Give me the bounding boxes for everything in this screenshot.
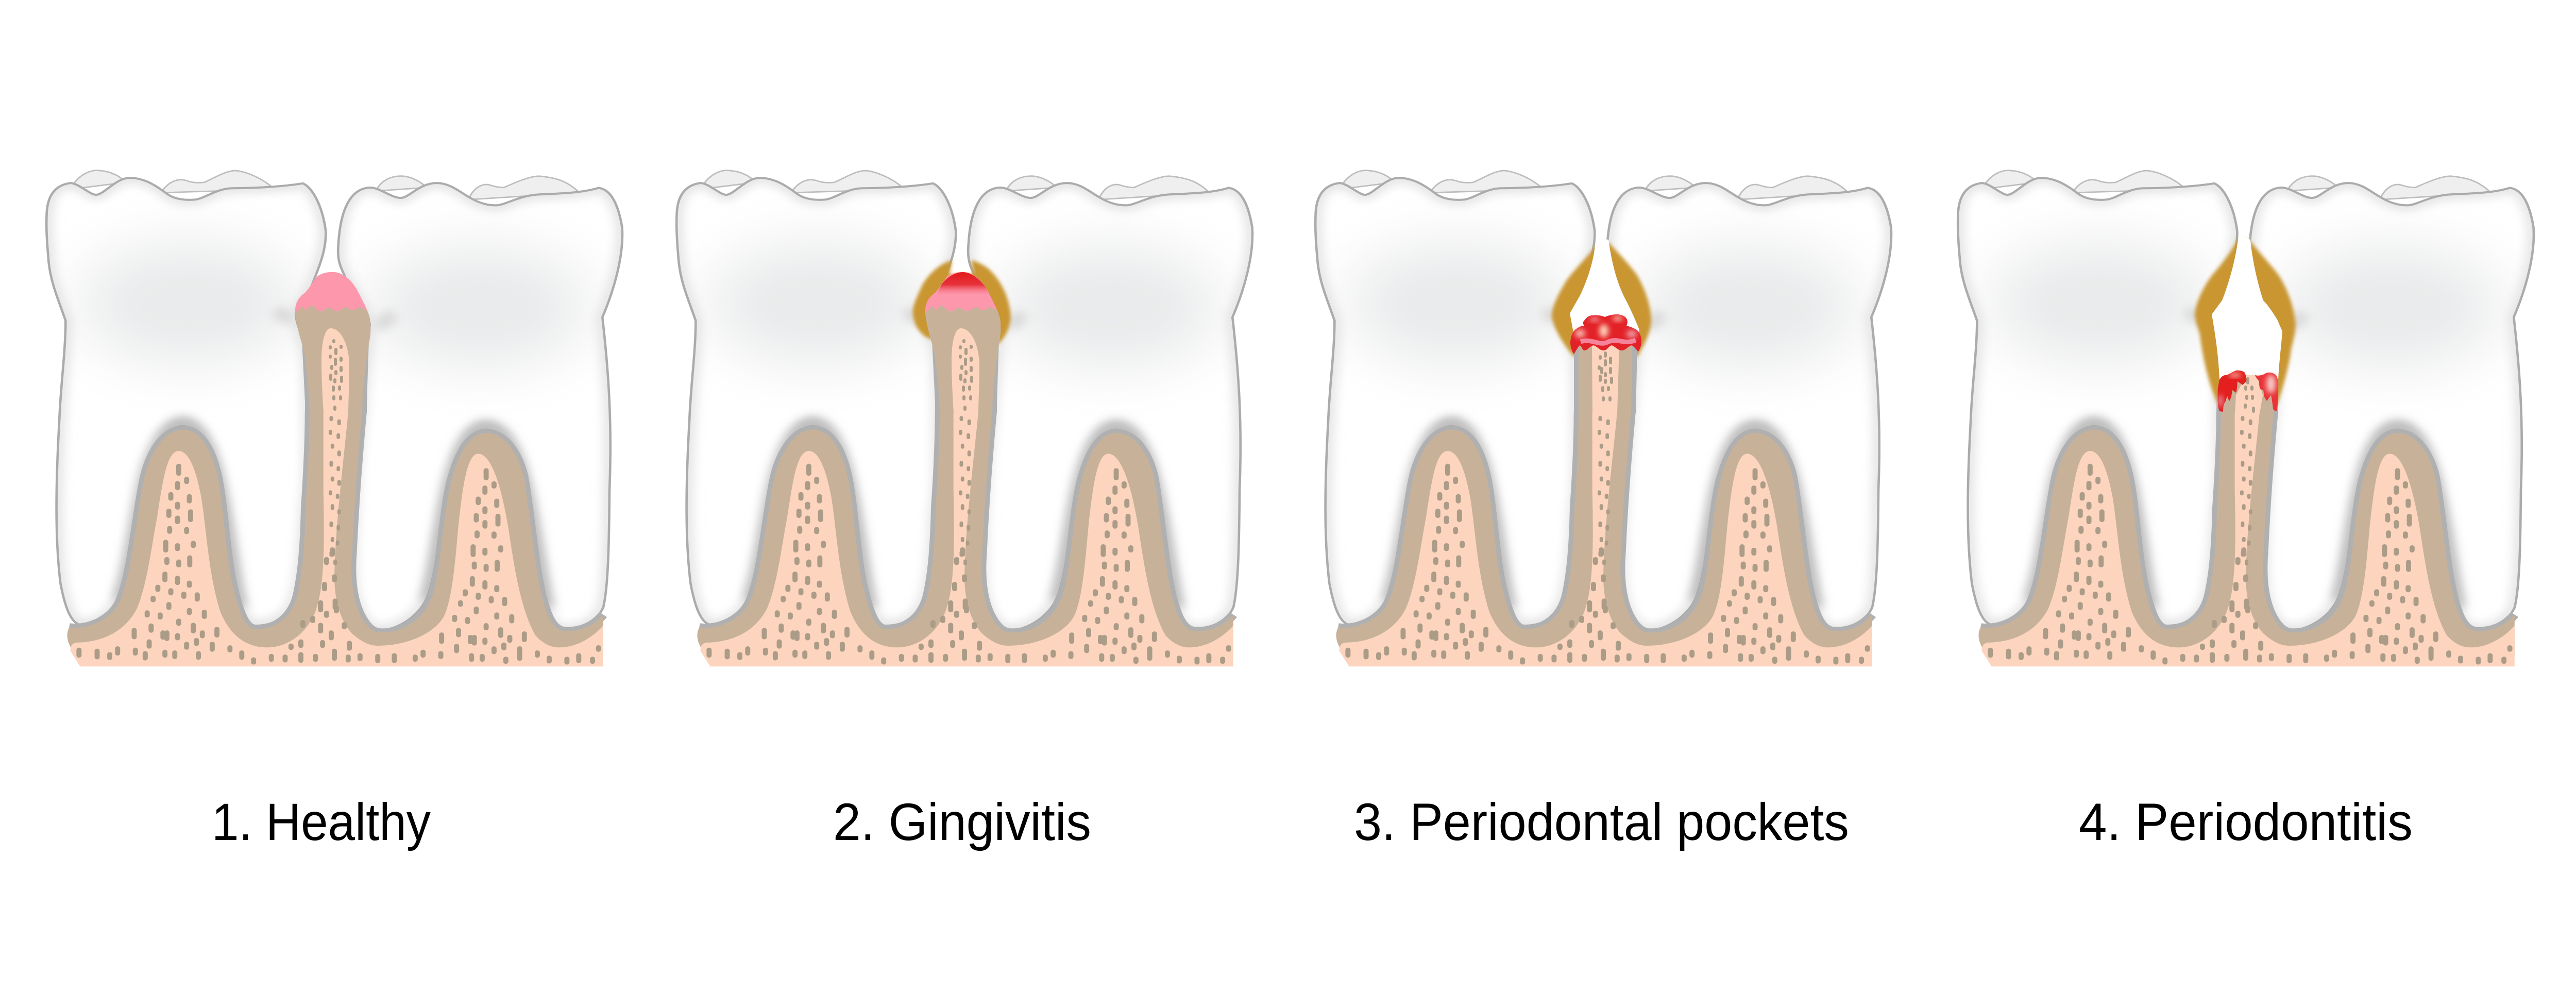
septum: [1574, 345, 1637, 413]
tartar deposits: [1552, 242, 1651, 357]
teeth, ligament and bone: [1315, 171, 1891, 666]
panel: 4. Periodontitis: [1958, 171, 2534, 666]
label: 2. Gingivitis: 2. Gingivitis: [833, 793, 1091, 851]
label: 3. Periodontal pockets: 3. Periodontal pockets: [1354, 793, 1849, 851]
label: 4. Periodontitis: 4. Periodontitis: [2079, 793, 2413, 851]
panel: 1. Healthy: [46, 171, 622, 666]
tartar deposits: [913, 260, 1011, 344]
teeth, ligament and bone: [46, 171, 622, 666]
teeth, ligament and bone: [1958, 171, 2534, 666]
inflamed red gum tip: [935, 272, 992, 301]
gum and septum: [925, 272, 1001, 413]
receded red gum, right: [2255, 373, 2278, 411]
tartar deposits: [2195, 238, 2296, 405]
panel: 3. Periodontal pockets: [1315, 171, 1891, 666]
septum: [2216, 375, 2278, 413]
label: 1. Healthy: 1. Healthy: [212, 793, 431, 851]
swollen red gum: [1570, 314, 1641, 354]
teeth, ligament and bone: [676, 171, 1252, 666]
open pocket: [2212, 234, 2282, 379]
open pocket: [1570, 238, 1639, 350]
receded red gum, left: [2217, 371, 2246, 412]
panel: 2. Gingivitis: [676, 171, 1252, 666]
healthy pink gum and septum: [295, 272, 370, 413]
